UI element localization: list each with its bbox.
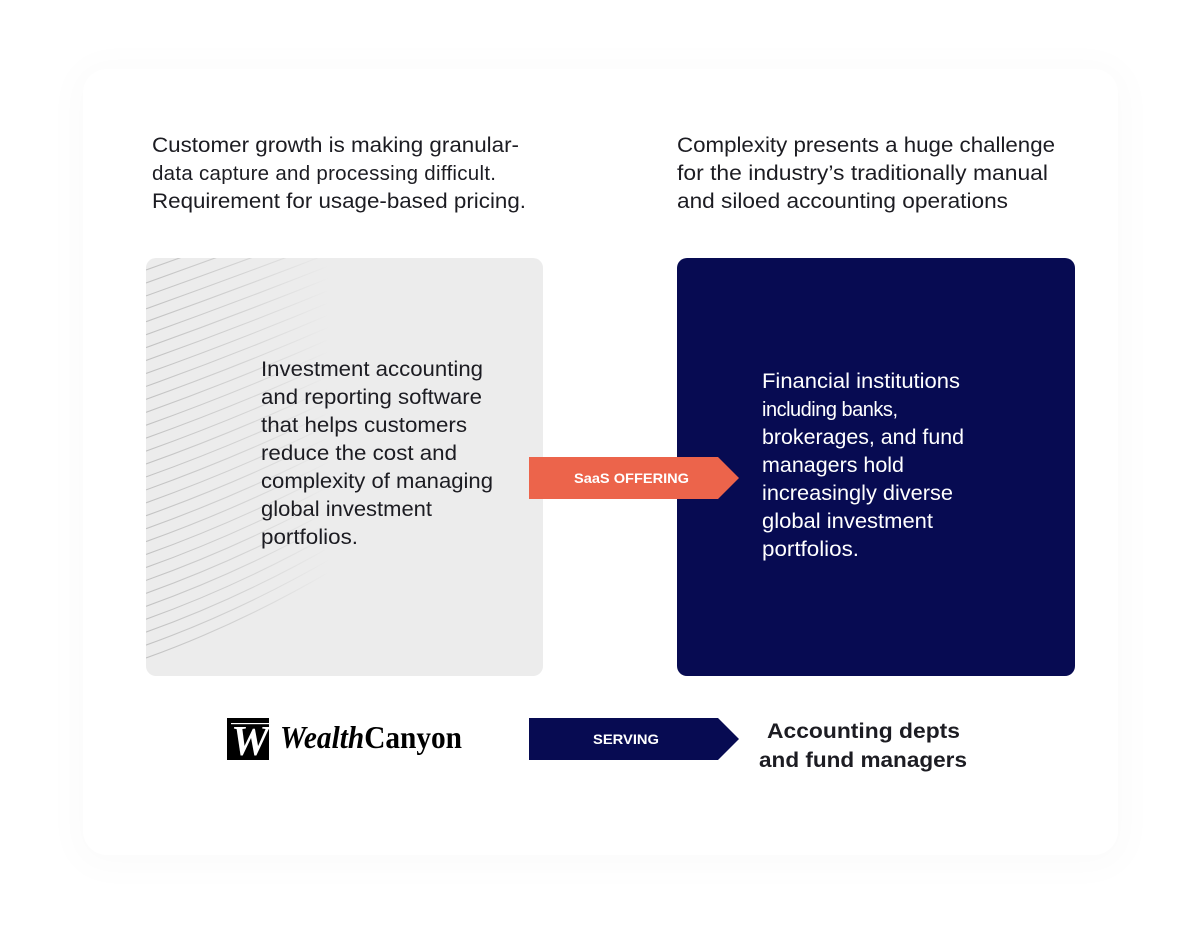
panel text: portfolios. (261, 526, 358, 549)
heading: right challenge text (677, 134, 1055, 213)
panel text: that helps customers (261, 414, 467, 437)
panel text: global investment (261, 498, 432, 521)
text: audience served: Accounting depts (767, 720, 960, 743)
arrow: serving: SERVING (593, 731, 659, 747)
panel text (261, 358, 493, 549)
panel text: managers hold (762, 454, 904, 477)
panel text: portfolios. (762, 538, 859, 561)
panel text: Financial institutions (762, 370, 960, 393)
heading: right challenge text: and siloed accounting operations (677, 190, 1008, 213)
panel text (762, 370, 964, 561)
panel: financial institutions (677, 258, 1075, 676)
heading: right challenge text: for the industry’s traditionally manual (677, 162, 1048, 185)
text: audience served: and fund managers (759, 749, 967, 772)
panel text: complexity of managing (261, 470, 493, 493)
arrow: serving (529, 718, 739, 760)
panel text: reduce the cost and (261, 442, 457, 465)
card background (83, 69, 1118, 855)
panel: software offering (146, 258, 543, 676)
logo: WealthCanyon: W (231, 719, 272, 765)
stripe pattern (146, 258, 302, 658)
panel text: increasingly diverse (762, 482, 953, 505)
arrow: SaaS offering: SaaS OFFERING (574, 470, 689, 486)
panel text: brokerages, and fund (762, 426, 964, 449)
heading: left challenge text: Requirement for usage-based pricing. (152, 190, 526, 213)
logo: WealthCanyon: WealthCanyon (280, 719, 462, 755)
heading: left challenge text (152, 134, 526, 213)
panel text: Investment accounting (261, 358, 483, 381)
panel text: including banks, (762, 399, 898, 421)
heading: left challenge text: Customer growth is making granular- (152, 134, 519, 157)
arrow: SaaS offering (529, 457, 739, 499)
panel text: and reporting software (261, 386, 482, 409)
panel text: global investment (762, 510, 933, 533)
heading: left challenge text: data capture and processing difficult. (152, 162, 496, 185)
text: audience served (759, 720, 967, 772)
heading: right challenge text: Complexity presents a huge challenge (677, 134, 1055, 157)
logo: WealthCanyon (227, 718, 462, 765)
